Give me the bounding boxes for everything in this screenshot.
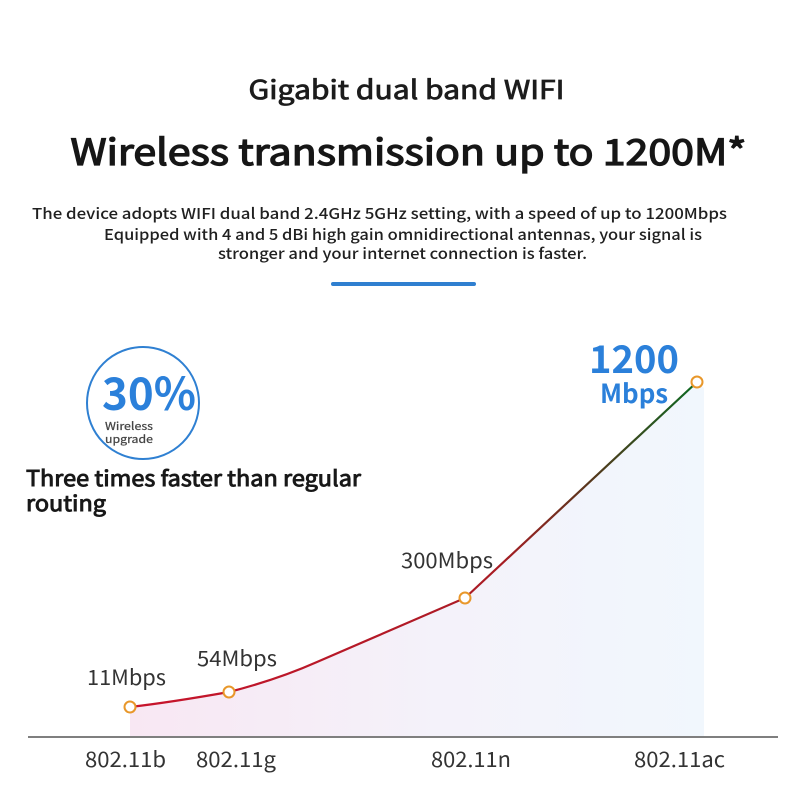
chart area fill: [130, 382, 704, 736]
badge: 30% wireless upgrade: upgrade: [105, 431, 153, 447]
title: Wireless transmission up to 1200M*: [70, 124, 746, 176]
description text: The device adopts WIFI dual band 2.4GHz 5GHz setting, with a speed of up to 1200Mbps: [32, 203, 727, 224]
axis labels: 802.11b: [85, 744, 166, 774]
axis labels: 802.11n: [431, 744, 511, 774]
top speed label: Mbps: [600, 374, 668, 411]
callout text: Three times faster than regular: [26, 462, 362, 493]
subtitle: Gigabit dual band WIFI: [248, 70, 564, 107]
badge: 30% wireless upgrade: 30%: [102, 358, 196, 423]
data point: 802.11g: [224, 686, 234, 698]
axis labels: [85, 744, 725, 774]
description text: [32, 203, 727, 264]
baseline axis: [28, 736, 778, 738]
top speed label: 1200: [589, 329, 679, 384]
speed line: [130, 382, 697, 707]
speed labels: 300Mbps: [401, 545, 493, 575]
description text: Equipped with 4 and 5 dBi high gain omnidirectional antennas, your signal is: [104, 224, 702, 245]
description text: stronger and your internet connection is faster.: [218, 243, 587, 264]
axis labels: 802.11ac: [634, 744, 725, 774]
accent divider: [331, 282, 476, 286]
line chart: [28, 329, 778, 774]
axis labels: 802.11g: [196, 744, 276, 774]
speed labels: 11Mbps: [87, 662, 166, 692]
badge: 30% wireless upgrade: Wireless: [105, 418, 153, 434]
speed labels: 54Mbps: [197, 643, 277, 673]
callout text: [26, 462, 362, 518]
data point: 802.11b: [124, 702, 136, 712]
data point: 802.11n: [460, 592, 470, 604]
data point: 802.11ac: [692, 376, 702, 388]
speed labels: [87, 545, 493, 692]
badge: 30% wireless upgrade: [87, 347, 199, 459]
top speed label: [589, 329, 679, 411]
callout text: routing: [26, 487, 106, 518]
